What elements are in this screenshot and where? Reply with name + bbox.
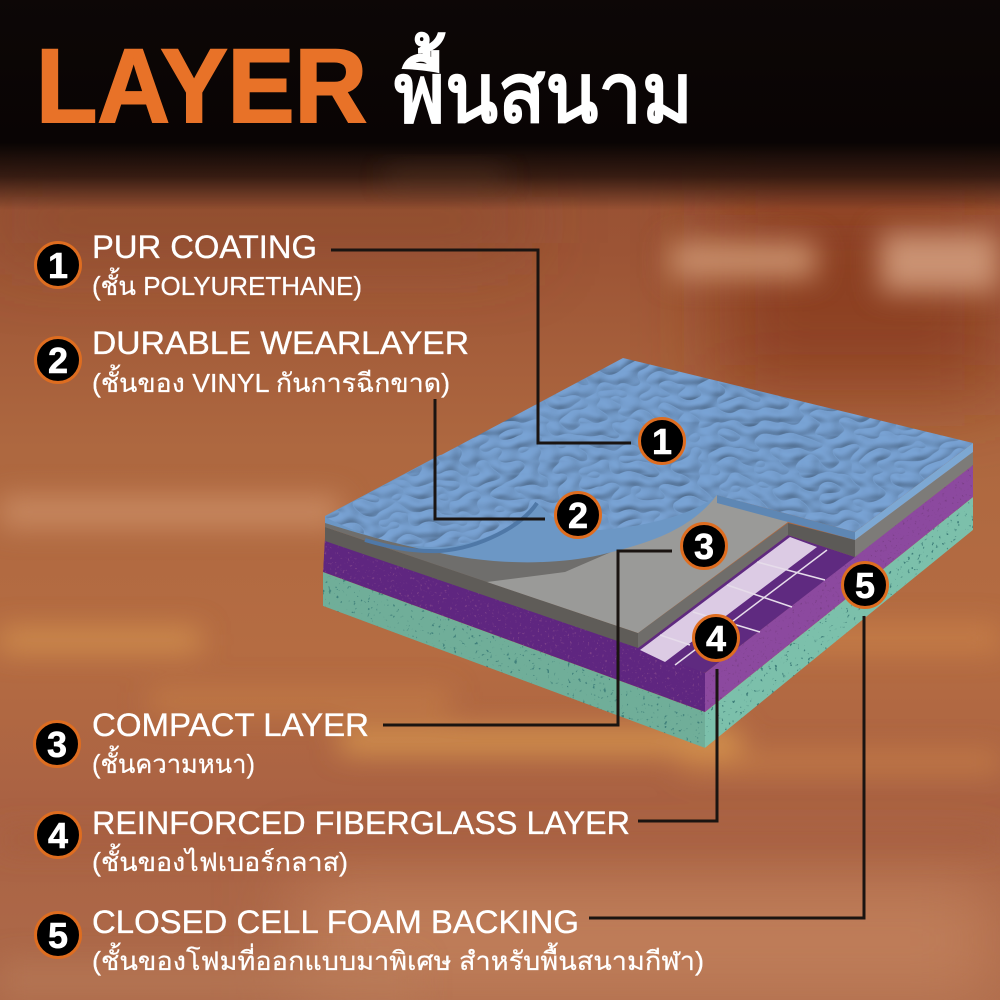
label 5: closed cell foam backing: 5: [48, 915, 68, 956]
title word: LAYER: LAYER: [36, 28, 367, 145]
label 4: reinforced fiberglass layer: 4: [48, 815, 68, 856]
label 1: PUR coating: (ชั้น POLYURETHANE): [92, 267, 362, 301]
layer 5: green foam: [323, 497, 973, 748]
illustration: flooring layer stack: [323, 358, 973, 748]
leader line 2: [435, 399, 545, 519]
label 3: compact layer: (ชั้นความหนา): [92, 745, 255, 779]
label 4: reinforced fiberglass layer: [36, 805, 630, 877]
label 5: closed cell foam backing: (ชั้นของโฟมที่ออกแบบมาพิเศษ สำหรับพื้นสนามกีฬา): [92, 942, 704, 976]
marker 2 on diagram: [556, 492, 600, 538]
label 4: reinforced fiberglass layer: (ชั้นของไฟเบอร์กลาส): [92, 843, 348, 877]
label 2: durable wearlayer: [36, 325, 469, 398]
marker 3 on diagram: [682, 524, 726, 568]
label 1: PUR coating: 1: [48, 245, 68, 286]
marker 4 on diagram: [694, 616, 738, 660]
leader line 3: [383, 551, 672, 725]
layer 1 and 2: blue surface sheet with curl: [325, 358, 973, 562]
label 4: reinforced fiberglass layer: REINFORCED FIBERGLASS LAYER: [92, 805, 630, 841]
label 3: compact layer: COMPACT LAYER: [92, 707, 369, 743]
label 1: PUR coating: [36, 229, 362, 301]
label 1: PUR coating: PUR COATING: [92, 229, 317, 265]
leader line 1: [331, 250, 631, 443]
marker 5 on diagram: 5: [855, 565, 875, 606]
leader line 4: [638, 669, 717, 821]
label 3: compact layer: 3: [47, 724, 67, 765]
marker 2 on diagram: 2: [568, 495, 588, 536]
label 2: durable wearlayer: (ชั้นของ VINYL กันการฉีกขาด): [92, 364, 450, 398]
title: [36, 28, 693, 145]
leader line 5: [589, 616, 864, 918]
marker 1 on diagram: 1: [652, 421, 672, 462]
marker 5 on diagram: [842, 562, 888, 608]
label 2: durable wearlayer: DURABLE WEARLAYER: [92, 325, 469, 361]
title word: Thai court floor: พื้นสนาม: [394, 31, 693, 140]
layer 3: grey compact layer: [325, 452, 973, 648]
label 5: closed cell foam backing: CLOSED CELL FOAM BACKING: [92, 904, 579, 940]
layer 4: purple base and fiberglass: [323, 465, 973, 712]
label 2: durable wearlayer: 2: [48, 340, 68, 381]
marker 3 on diagram: 3: [694, 526, 714, 567]
marker 4 on diagram: 4: [706, 618, 726, 659]
marker 1 on diagram: [640, 418, 684, 464]
label 5: closed cell foam backing: [36, 904, 704, 976]
label 3: compact layer: [34, 707, 369, 779]
